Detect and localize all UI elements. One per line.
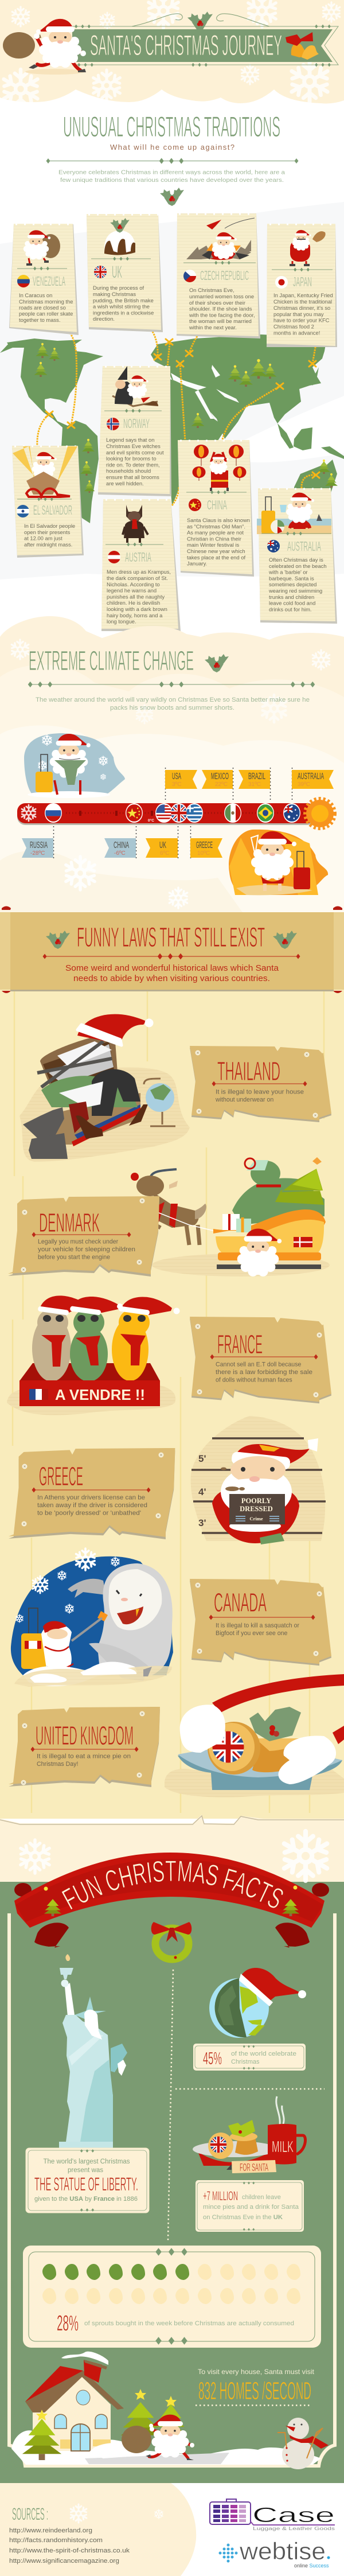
sign: France: FRANCE <box>217 1329 263 1359</box>
fact box: statue of Liberty: given to the USA by France in 1886 <box>34 2196 138 2203</box>
fact box: sprouts: of sprouts bought in the week before Christmas are actually consumed <box>84 2320 294 2327</box>
route lines and location markers <box>37 332 316 505</box>
panel: fun facts background <box>0 1831 344 2483</box>
sign: Thailand: without underwear on <box>215 1096 273 1103</box>
note: El Salvador: at 12.00 am just <box>24 535 62 542</box>
note: Japan <box>267 224 337 347</box>
0 degree label: 0°C <box>148 818 154 823</box>
mug label: MILK <box>272 2138 294 2155</box>
country temperature flags, bottom <box>22 826 222 858</box>
note: Venezuela: Christmas morning the <box>19 298 73 305</box>
sign: Thailand: It is illegal to leave your house <box>216 1089 304 1096</box>
note: Czech Republic: On Christmas Eve, <box>189 287 234 293</box>
temperature bar <box>17 799 335 828</box>
note: Austria: hairy body, horns and a <box>107 612 163 618</box>
sign: Denmark: Legally you must check under <box>38 1238 119 1245</box>
note: UK: pudding, the British make <box>93 297 154 303</box>
note: Japan: Chicken is the traditional <box>273 298 332 305</box>
note: El Salvador <box>12 446 84 558</box>
placard text: Crime <box>249 1516 263 1522</box>
country temperature flags, bottom: -6ºC <box>114 850 126 857</box>
country temperature flags, top: MEXICO <box>211 772 229 781</box>
note: China: Chinese new year which <box>187 548 245 554</box>
icon: wreath with bow <box>151 1922 191 1959</box>
panel: sources <box>0 2483 196 2576</box>
illustration: sweltering santa <box>229 830 328 895</box>
sign: Greece: taken away if the driver is considered <box>37 1502 147 1509</box>
icon: santa with shoes <box>186 218 255 260</box>
note: UK: making Christmas <box>93 291 136 297</box>
banner title: FUN CHRISTMAS FACTS <box>62 1861 283 1910</box>
sign: United Kingdom <box>9 1707 160 1787</box>
note: Japan: have to order your KFC <box>273 317 330 324</box>
sign: Canada: It is illegal to kill a sasquatch or <box>216 1622 299 1629</box>
fact box: 7 million children <box>196 2180 304 2232</box>
sign: Denmark: before you start the engine <box>38 1254 110 1261</box>
note: Austria: AUSTRIA <box>125 550 151 565</box>
country temperature flags, bottom: 10ºC <box>197 850 210 857</box>
country temperature flags, bottom: RUSSIA <box>30 840 48 850</box>
note: Japan: Christmas food 2 <box>273 324 314 329</box>
seas on map <box>171 365 239 419</box>
note: Czech Republic <box>177 213 260 338</box>
heading: unusual Christmas traditions <box>63 111 280 151</box>
illustration: freezing santa <box>24 733 125 798</box>
climate intro text: packs his snow boots and summer shorts. <box>110 705 234 711</box>
country temperature flags, top: 3ºC <box>172 781 181 788</box>
icon: santa on roller skates <box>24 230 60 266</box>
country temperature flags, top: BRAZIL <box>248 772 265 781</box>
logo: Case <box>210 2499 335 2531</box>
note: China: CHINA <box>207 497 227 512</box>
illustration: statue of Liberty <box>59 1954 127 2148</box>
country temperature flags, top: USA <box>172 772 181 781</box>
note: Australia: leave cold food and <box>269 600 315 606</box>
note: Czech Republic: of their shoes over their <box>189 299 245 306</box>
country temperature flags, bottom: UK <box>159 840 166 850</box>
note: Austria: Men dress up as Krampus, <box>107 569 171 575</box>
note: Australia: barbeque. Santa is <box>269 575 314 582</box>
sign: Greece: to be 'poorly dressed' or 'unbathed' <box>37 1510 141 1517</box>
sign: United Kingdom: It is illegal to eat a mince pie on <box>37 1753 131 1760</box>
illustration: poorly dressed santa mugshot: 5' <box>198 1453 206 1464</box>
sign: France: of dolls without human faces <box>216 1377 292 1384</box>
panel: sources: http://www.the-spirit-of-christmas.co.uk <box>9 2547 130 2554</box>
note: China <box>178 440 254 577</box>
scroll text: Some weird and wonderful historical laws which Santa <box>65 964 279 973</box>
icon: witch with santa on broom <box>112 366 158 406</box>
fact box: 45 percent: 45% <box>203 2048 222 2068</box>
intro text: few unique traditions that various countries have developed over the years. <box>60 177 284 184</box>
placard text <box>240 1497 273 1522</box>
country temperature flags, bottom: -28ºC <box>30 850 45 857</box>
sign: Denmark: your vehicle for sleeping children <box>38 1246 135 1253</box>
icon: Krampus <box>123 505 148 543</box>
text: 832 homes per second: To visit every house, Santa must visit <box>198 2368 315 2376</box>
note: Austria: long tongue. <box>107 618 136 624</box>
panel: sources: SOURCES : <box>12 2505 48 2524</box>
country temperature flags, top: 31ºC <box>248 781 261 788</box>
placard text: DRESSED <box>240 1505 273 1513</box>
note: Venezuela <box>9 224 79 335</box>
fact box: sprouts: 28% <box>57 2312 79 2336</box>
note: Norway: ensure that all brooms <box>106 474 159 480</box>
map trees <box>34 343 338 493</box>
panel: sources: http://www.reindeerland.org <box>9 2527 92 2534</box>
note: Austria: the dark companion of St. <box>107 575 168 581</box>
note: Norway: NORWAY <box>123 416 150 431</box>
icon: santa with lanterns <box>193 445 247 491</box>
placard text: POORLY <box>241 1497 271 1505</box>
note: Venezuela: together to mass. <box>19 317 60 323</box>
subheading: What will he come up against? <box>110 143 234 151</box>
fact box: 7 million children: on Christmas Eve in the UK <box>203 2214 283 2221</box>
illustration: poorly dressed santa mugshot: 3' <box>198 1517 206 1528</box>
note: Austria: children. He is devilish <box>107 600 160 606</box>
note: Venezuela: roads are closed so <box>19 304 66 311</box>
sign: Canada <box>190 1579 331 1666</box>
pictogram: 7 of 24 sprouts <box>42 2264 189 2280</box>
note: UK <box>87 214 163 332</box>
icon: santa with chicken leg <box>290 230 326 266</box>
icon: santa on the beach <box>257 493 331 534</box>
note: China: takes place at the end of <box>187 554 246 561</box>
illustration: reindeer pulling sleigh <box>131 1157 330 1277</box>
note: Japan: months in advance! <box>273 329 320 336</box>
note: Venezuela: people can roller skate <box>19 310 73 317</box>
note: Australia: celebrated on the beach <box>269 563 327 569</box>
sign: Canada: Bigfoot if you ever see one <box>216 1630 288 1637</box>
fact box: 7 million children: mince pies and a drink for Santa <box>203 2204 299 2211</box>
sign: Thailand <box>190 1046 331 1122</box>
note: UK: a wish whilst stirring the <box>93 303 150 310</box>
title banner <box>72 11 338 67</box>
logo: webtise <box>219 2538 330 2569</box>
heading: extreme climate change <box>29 646 229 676</box>
illustration: E.T. dolls for sale <box>7 1295 180 1415</box>
sign: France: Cannot sell an E.T doll because <box>216 1361 301 1368</box>
sign: Thailand: THAILAND <box>217 1056 280 1086</box>
sign: Greece <box>9 1448 175 1539</box>
fact box: statue of Liberty: The world's largest Christmas <box>43 2158 130 2165</box>
sign: Denmark <box>8 1196 159 1277</box>
note: UK: ingredients in a clockwise <box>93 310 154 316</box>
illustration: mince pie in mittens <box>165 1674 344 1797</box>
illustration: globe in Santa hat <box>209 1968 306 2038</box>
intro text <box>58 169 285 184</box>
divider <box>28 682 315 687</box>
banner: fun Christmas facts <box>14 1853 329 1948</box>
scroll text <box>65 964 279 983</box>
note: El Salvador: after midnight mass. <box>24 542 72 547</box>
intro text: Everyone celebrates Christmas in different ways across the world, here are a <box>58 169 285 176</box>
note: Austria: Nicholas. According to <box>107 581 160 587</box>
note: Norway: and evil spirits come out <box>106 449 164 456</box>
fact box: 45 percent: Christmas <box>231 2059 260 2065</box>
note: Australia: trunks and children <box>269 594 314 600</box>
country temperature flags, top: 22ºC <box>215 781 228 788</box>
sign: Greece: In Athens your drivers license can be <box>37 1494 145 1501</box>
note: Norway: households should <box>106 468 151 474</box>
note: Japan: In Japan, Kentucky Fried <box>273 292 333 298</box>
fact box: sprouts <box>23 2246 321 2348</box>
icon: Christmas pudding <box>104 218 135 255</box>
note: UK: During the process of <box>93 285 144 291</box>
note: Japan: Christmas dinner, it's so <box>273 305 330 311</box>
country temperature flags, top: 39ºC <box>298 781 310 788</box>
sign: United Kingdom: Christmas Day! <box>37 1761 78 1768</box>
logo: Case: Luggage & Leather Goods <box>253 2526 335 2531</box>
note: China: January. <box>187 560 207 567</box>
note: China: Santa Claus is also known <box>187 517 250 523</box>
illustration: santa and sasquatch <box>11 1548 173 1687</box>
note: Japan: JAPAN <box>293 274 312 289</box>
fact box: 7 million children: +7 MILLION <box>203 2189 238 2203</box>
running santa with sack <box>3 19 86 75</box>
note: Venezuela: In Caracus on <box>19 292 52 298</box>
fact box: 45 percent <box>193 2044 306 2071</box>
note: Austria <box>101 499 181 631</box>
note: Norway: looking for brooms to <box>106 456 157 461</box>
note: Norway: ride on. To deter them, <box>106 461 160 468</box>
note: Japan: popular that you may <box>273 311 324 317</box>
note: Norway: are well hidden. <box>106 480 144 487</box>
scroll text: needs to abide by when visiting various countries. <box>73 974 270 983</box>
note: Austria: looking with a dark brown <box>107 606 167 612</box>
note: Czech Republic: the woman will be married <box>189 318 252 324</box>
icon: holly <box>160 188 184 206</box>
sign: Denmark: DENMARK <box>39 1208 100 1238</box>
fact box: 45 percent: of the world celebrate <box>231 2050 296 2057</box>
note: Australia: drinks out for him. <box>269 606 312 613</box>
label: a vendre: A VENDRE !! <box>55 1386 145 1403</box>
country temperature flags, bottom: CHINA <box>114 840 129 850</box>
panel: sources: http://facts.randomhistory.com <box>9 2537 103 2544</box>
logo: Case: Case <box>252 2503 335 2527</box>
note: Australia: sometimes depicted <box>269 581 316 587</box>
note: UK: direction. <box>93 316 115 322</box>
sign: United Kingdom: UNITED KINGDOM <box>36 1721 134 1750</box>
note: China: As many people are not <box>187 529 244 536</box>
fact box: statue of Liberty <box>26 2148 149 2213</box>
panel: laws background <box>0 912 344 1882</box>
note: El Salvador: In El Salvador people <box>24 523 75 529</box>
note: Australia: wearing red swimming <box>268 587 322 594</box>
illustration: snowy house scene <box>11 2352 321 2465</box>
note: El Salvador: open their presents <box>24 529 71 535</box>
country temperature flags, top <box>165 768 334 800</box>
note: Venezuela: VENEZUELA <box>33 274 65 289</box>
logo: webtise: webtise <box>239 2538 326 2565</box>
sign: Greece: GREECE <box>39 1461 83 1491</box>
climate intro text: The weather around the world will vary wildly on Christmas Eve so Santa better make sure he <box>36 696 310 703</box>
country temperature flags, bottom: 6ºC <box>160 850 169 857</box>
note: Australia <box>257 488 337 624</box>
illustration: mince pie and milk for Santa <box>193 2096 306 2173</box>
world map <box>0 334 344 523</box>
divider <box>46 158 298 164</box>
climate intro text <box>36 696 310 711</box>
sign: Canada: CANADA <box>214 1587 267 1617</box>
note: Austria: legend he warns and <box>107 587 157 593</box>
fact box: statue of Liberty: THE STATUE OF LIBERTY. <box>34 2174 138 2194</box>
note: Norway <box>98 366 171 496</box>
dotted dividers <box>168 1970 325 2240</box>
text: 832 homes per second <box>196 2368 315 2405</box>
header band with scalloped edge <box>0 0 344 108</box>
sign: France: there is a law forbidding the sale <box>216 1369 312 1376</box>
note: Norway: Legend says that on <box>106 437 154 443</box>
illustration: poorly dressed santa mugshot: 4' <box>198 1487 206 1497</box>
note: Czech Republic: within the next year. <box>189 324 237 330</box>
country temperature flags, bottom: GREECE <box>196 840 213 850</box>
logo: webtise: online Success <box>294 2563 329 2569</box>
icon: snowman <box>277 2418 329 2469</box>
note: Czech Republic: shoulder. If the shoe lands <box>189 305 252 312</box>
note: China: Christian in China their <box>187 536 241 542</box>
panel: climate background <box>0 616 344 918</box>
fact box: statue of Liberty: present was <box>68 2167 103 2174</box>
sign: France <box>190 1317 331 1403</box>
note: UK: UK <box>112 263 122 282</box>
icon: santa in a present box <box>13 446 77 497</box>
note: China: as "Christmas Old Man". <box>187 523 245 530</box>
note: Czech Republic: CZECH REPUBLIC <box>200 268 249 283</box>
panel: funny laws scroll <box>0 906 344 993</box>
note: Czech Republic: unmarried women toss one <box>189 293 254 299</box>
note: China: main Winter festival is <box>187 542 239 548</box>
note: Norway: Christmas Eve witches <box>106 443 161 449</box>
note: Austria: punishes all the naughty <box>107 593 165 600</box>
icon: bell and bow <box>286 32 319 60</box>
panel: sources: http://www.significancemagazine.org <box>9 2558 119 2565</box>
note: Australia: with a 'barbie' or <box>268 569 308 575</box>
note: El Salvador: EL SALVADOR <box>33 503 72 517</box>
fact box: 7 million children: children leave <box>242 2194 281 2201</box>
illustration: poorly dressed santa mugshot <box>191 1416 326 1544</box>
note: Australia: Often Christmas day is <box>269 557 323 563</box>
world map backdrop <box>0 202 344 579</box>
illustration: overstuffed suitcase <box>19 1014 190 1162</box>
illustration: mince pie and milk for Santa: FOR SANTA <box>240 2162 268 2173</box>
note: Czech Republic: with the toe facing the door, <box>189 312 255 318</box>
